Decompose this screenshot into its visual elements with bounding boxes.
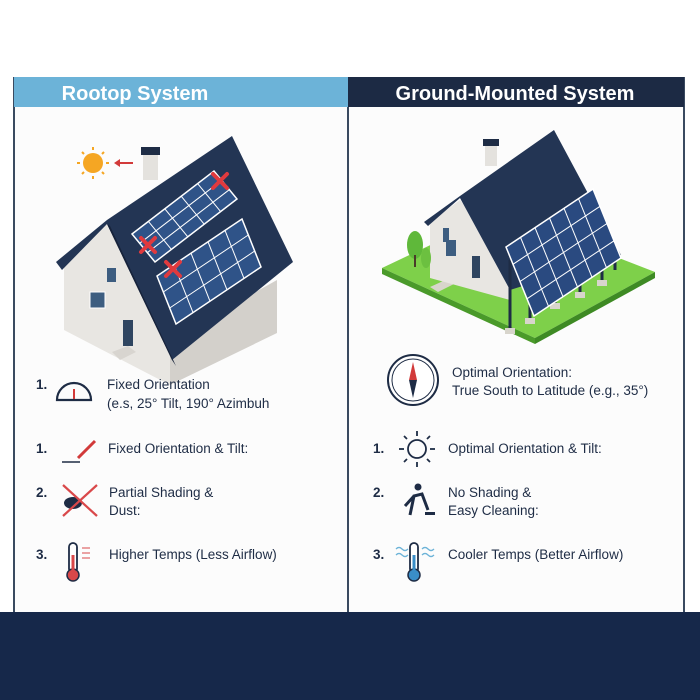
- item: no shading: Easy Cleaning:: [448, 503, 539, 518]
- item: optimal orientation compass: True South to Latitude (e.g., 35°): [452, 383, 648, 398]
- heading: rooftop: Rootop System: [62, 83, 208, 105]
- illustration: ground-mounted house: [382, 130, 655, 344]
- list: rooftop items: [36, 377, 277, 581]
- item: partial shading: Partial Shading &: [109, 485, 213, 500]
- icon: sun with arrow: [77, 147, 133, 179]
- item: optimal orientation & tilt: Optimal Orientation & Tilt:: [448, 441, 602, 456]
- panel: ground-mounted: [348, 78, 684, 613]
- item: higher temps: Higher Temps (Less Airflow): [109, 547, 277, 562]
- item: cooler temps: [373, 543, 623, 581]
- item: cooler temps: 3.: [373, 547, 384, 562]
- item: fixed orientation azimuth: 1.: [36, 377, 47, 392]
- footer band: [0, 612, 700, 700]
- item: optimal orientation compass: Optimal Orientation:: [452, 365, 572, 380]
- item: optimal orientation & tilt: [373, 431, 602, 467]
- item: partial shading: [36, 485, 213, 518]
- item: no shading: 2.: [373, 485, 384, 500]
- heading: ground-mounted: [348, 77, 684, 107]
- panel: rooftop: [14, 78, 348, 613]
- item: fixed orientation azimuth: (e.s, 25° Tilt, 190° Azimbuh: [107, 396, 269, 411]
- item: fixed orientation azimuth: [36, 377, 269, 411]
- illustration: rooftop house: [56, 136, 293, 385]
- list: ground-mounted items: [373, 355, 648, 581]
- item: fixed orientation & tilt: 1.: [36, 441, 47, 456]
- item: no shading: No Shading &: [448, 485, 531, 500]
- item: optimal orientation compass: [388, 355, 648, 405]
- heading: ground-mounted: Ground-Mounted System: [396, 83, 634, 105]
- item: optimal orientation & tilt: 1.: [373, 441, 384, 456]
- item: fixed orientation & tilt: [36, 441, 248, 462]
- item: higher temps: [36, 543, 277, 581]
- item: partial shading: Dust:: [109, 503, 141, 518]
- heading: rooftop: [14, 77, 348, 107]
- item: higher temps: 3.: [36, 547, 47, 562]
- item: fixed orientation azimuth: Fixed Orientation: [107, 377, 210, 392]
- item: partial shading: 2.: [36, 485, 47, 500]
- item: cooler temps: Cooler Temps (Better Airflow): [448, 547, 623, 562]
- item: fixed orientation & tilt: Fixed Orientation & Tilt:: [108, 441, 248, 456]
- item: no shading: [373, 484, 539, 518]
